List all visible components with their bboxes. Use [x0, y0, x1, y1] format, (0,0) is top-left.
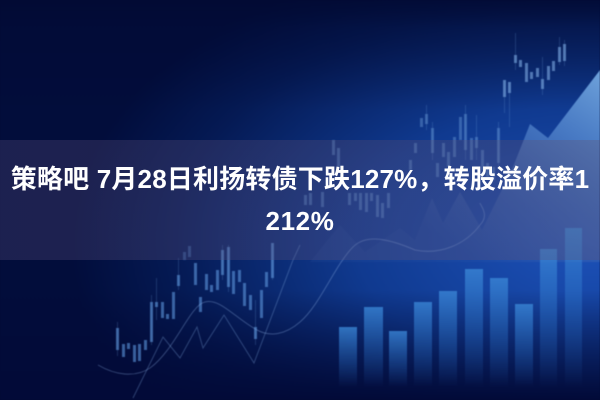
translucent title band [0, 140, 600, 260]
candlesticks: upper right cluster [503, 44, 566, 97]
title: 212% [266, 206, 334, 236]
zigzag trend line [133, 245, 300, 398]
title: 策略吧 7月28日利扬转债下跌127%，转股溢价率1 [11, 164, 589, 194]
title [11, 164, 589, 236]
candlesticks: lower left cluster [116, 243, 274, 362]
candlesticks: middle cluster [304, 114, 500, 218]
bar chart [339, 228, 582, 387]
mountain area chart [310, 70, 600, 262]
candlestick wicks [118, 33, 564, 356]
smooth trend line [98, 203, 484, 374]
